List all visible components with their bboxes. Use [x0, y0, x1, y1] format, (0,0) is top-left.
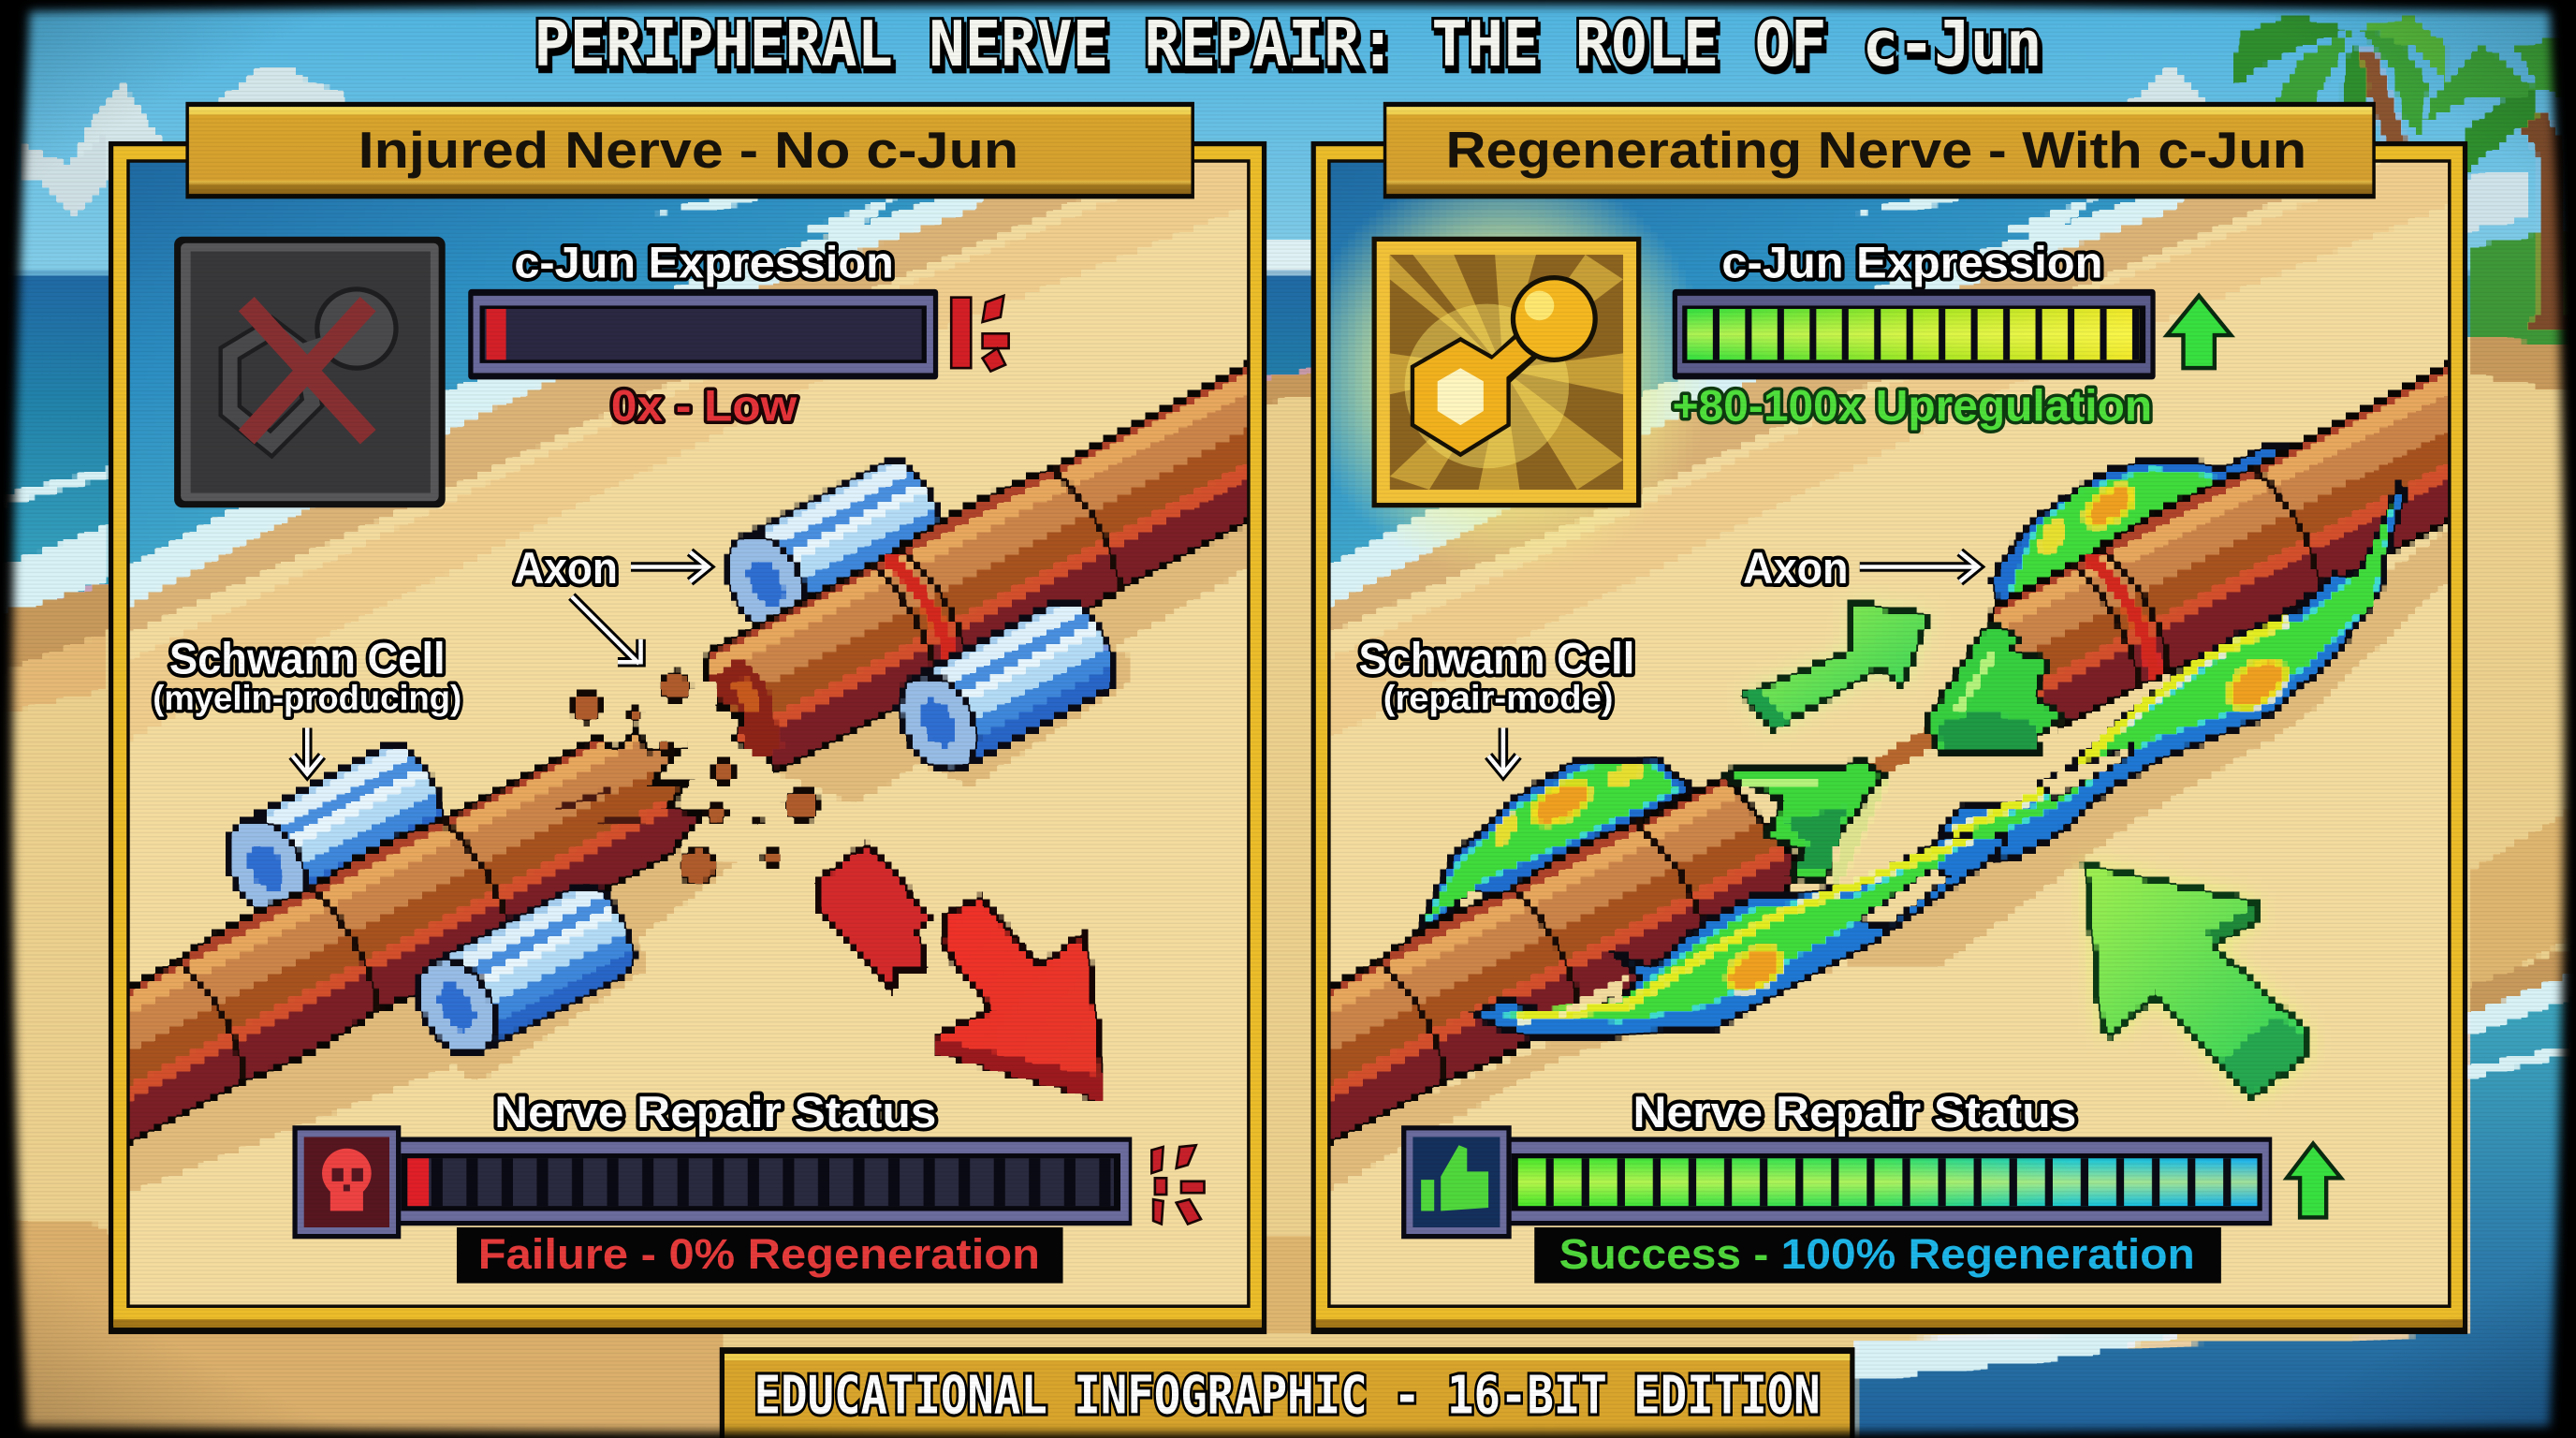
arrow: axon right — [631, 552, 708, 581]
nerve repair status bar: failure — [391, 1137, 1132, 1225]
arrow: Schwann cell down — [292, 727, 322, 774]
Schwann cell, upper back — [711, 450, 955, 644]
beach interior — [1314, 148, 2465, 1314]
nerve debris — [572, 672, 818, 884]
Schwann cell, lower front — [402, 874, 646, 1068]
Axon label: Axon — [1743, 544, 1848, 594]
title: PERIPHERAL NERVE REPAIR: THE ROLE OF c-Jun — [534, 7, 2042, 81]
arrow: expression up — [2167, 296, 2231, 368]
arrow: status up — [2287, 1143, 2341, 1217]
green growth arrow, small — [1744, 602, 1930, 729]
c-Jun expression label: c-Jun Expression — [1721, 239, 2102, 288]
icon glow — [1299, 166, 1710, 577]
panel title plate — [185, 102, 1194, 198]
arrow: axon gap — [572, 596, 641, 664]
nerve shadow — [115, 509, 1265, 1199]
c-Jun expression bar: empty — [468, 289, 938, 379]
pixel-art scene — [129, 163, 1247, 1305]
Schwann cell: right, repair mode — [1939, 483, 2407, 862]
green growth arrow, large — [2085, 864, 2306, 1097]
severed nerve: proximal stump — [690, 323, 1383, 786]
panel title plate: Injured Nerve - No c-Jun — [359, 122, 1018, 179]
Schwann cell label: (repair-mode) — [1383, 679, 1613, 717]
nerve: lower segment — [1253, 758, 1817, 1152]
0x low value: 0x - Low — [611, 381, 797, 431]
footer plate: EDUCATIONAL INFOGRAPHIC - 16-BIT EDITION — [754, 1365, 1821, 1426]
panel frame — [109, 141, 1266, 1334]
panel: regenerating nerve, with c-Jun — [1253, 102, 2576, 1334]
panel title plate: Regenerating Nerve - With c-Jun — [1445, 122, 2306, 179]
broken red arrow — [815, 844, 1102, 1099]
nerve shadow — [1314, 518, 2465, 1199]
c-Jun expression label: c-Jun Expression — [514, 239, 894, 288]
Schwann cell: lower, repair mode — [1473, 800, 2032, 1038]
icon: thumbs up — [1401, 1125, 1512, 1239]
nerve: upper segment — [1963, 323, 2576, 747]
icon: glowing c-Jun molecule — [1372, 237, 1641, 507]
Schwann cell, lower-left back — [212, 735, 456, 929]
failure status caption: Failure - 0% Regeneration — [478, 1230, 1040, 1278]
upregulation value: +80-100x Upregulation — [1673, 381, 2152, 431]
icon: skull — [292, 1125, 401, 1239]
growth cone: lower — [1725, 759, 1882, 881]
footer plate — [720, 1347, 1854, 1438]
Schwann cell label — [1358, 635, 1634, 717]
panel title plate — [1383, 102, 2376, 198]
nerve repair status label: Nerve Repair Status — [1633, 1088, 2076, 1137]
growth cone: upper — [1925, 624, 2063, 755]
panel: injured nerve, no c-Jun — [109, 101, 1267, 1335]
arrow: axon right — [1860, 552, 1978, 581]
Schwann cell label: Schwann Cell — [169, 635, 446, 684]
palm trees — [2231, 13, 2576, 332]
pixel-art scene — [1253, 148, 2576, 1314]
Schwann cell label — [153, 635, 461, 717]
Schwann cell label: Schwann Cell — [1358, 635, 1634, 684]
beach interior — [115, 148, 1265, 1314]
icon: crossed-out molecule — [174, 237, 446, 507]
c-Jun expression bar: full — [1673, 289, 2156, 379]
Schwann cell: upper, repair mode — [1993, 446, 2304, 616]
nerve repair status bar: success — [1503, 1137, 2272, 1225]
Schwann cell, right front — [884, 590, 1127, 785]
Schwann cell: left, repair mode — [1412, 757, 1692, 943]
success status caption: Success - 100% Regeneration — [1559, 1230, 2195, 1278]
panel frame — [1311, 141, 2467, 1334]
Axon label: Axon — [514, 544, 618, 594]
icon: failure ticks — [1151, 1145, 1204, 1224]
arrow: Schwann cell down — [1488, 727, 1518, 774]
severed nerve: distal stump — [52, 700, 724, 1152]
thin regenerating axon bridge — [1873, 731, 1939, 772]
nerve repair status label: Nerve Repair Status — [494, 1088, 936, 1137]
Schwann cell label: (myelin-producing) — [153, 679, 461, 717]
icon: low-level warning ticks — [951, 296, 1009, 372]
